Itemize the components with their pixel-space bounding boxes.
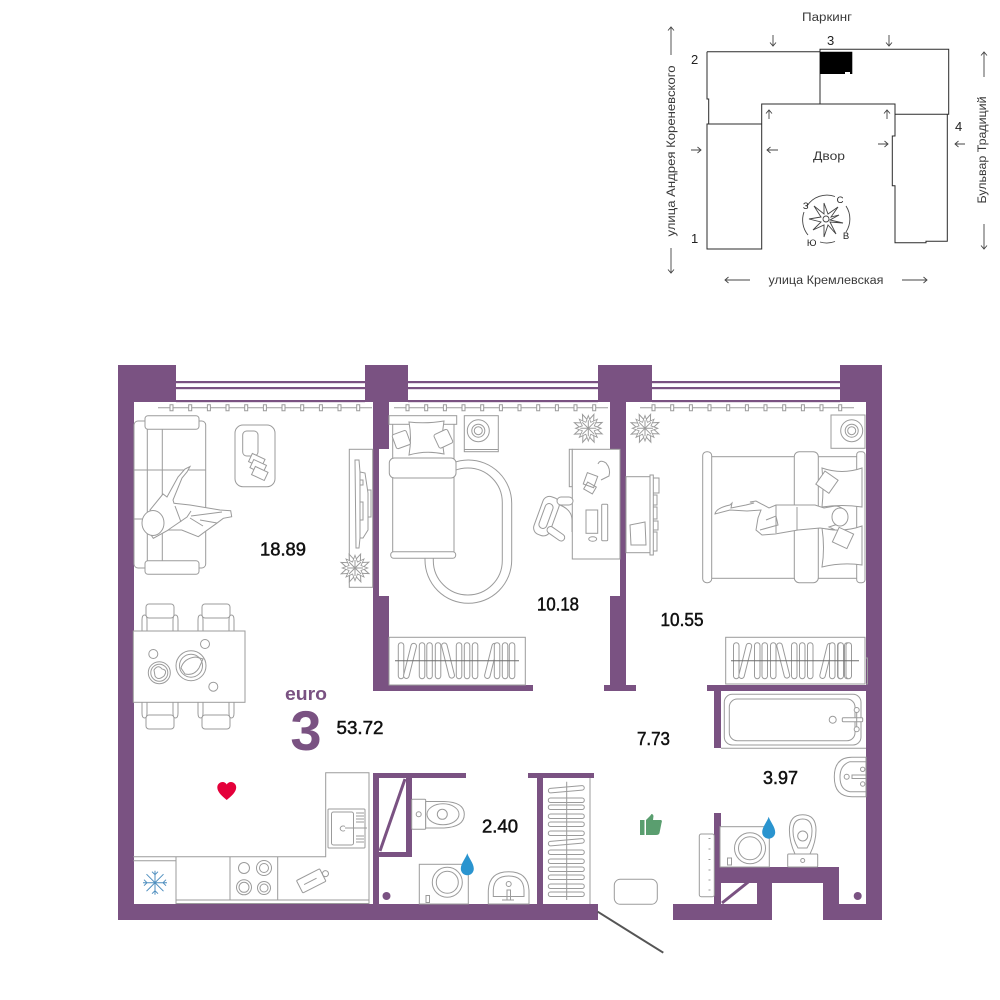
wardrobe room 3 bbox=[726, 637, 868, 684]
bathroom 2 fixtures bbox=[412, 778, 590, 904]
highlighted apartment section bbox=[820, 52, 852, 74]
bathroom 3 fixtures bbox=[699, 694, 866, 897]
icon: water drop bbox=[461, 853, 474, 875]
section numbers: 1 bbox=[691, 231, 698, 246]
coat rack bbox=[548, 778, 590, 904]
wash basin bbox=[488, 872, 529, 904]
desk with computer bbox=[569, 449, 620, 559]
doormat bbox=[614, 879, 657, 904]
person on bed bbox=[715, 501, 848, 535]
room count numeral: 3 bbox=[290, 699, 322, 762]
nightstand with lamp bbox=[464, 416, 498, 452]
living room furniture bbox=[133, 416, 375, 904]
building outline bbox=[707, 49, 949, 249]
compass: З bbox=[803, 201, 809, 212]
direction arrows bbox=[668, 27, 987, 283]
kitchen sink bbox=[328, 809, 367, 848]
label: Traditions boulevard: Бульвар Традиций bbox=[977, 96, 989, 204]
cutting board bbox=[296, 866, 331, 893]
compass bbox=[803, 195, 850, 249]
washing machine bbox=[419, 864, 468, 904]
area: corridor: 7.73 bbox=[637, 729, 670, 749]
wardrobe room 2 bbox=[389, 637, 525, 685]
entrance door bbox=[598, 912, 663, 953]
plant: living room bbox=[335, 548, 375, 588]
area: room 2: 10.18 bbox=[537, 594, 579, 614]
curtain rails bbox=[158, 405, 854, 411]
toilet bbox=[788, 815, 818, 867]
label: Koreneevskogo street: улица Андрея Кореневского bbox=[666, 66, 678, 236]
section numbers: 3 bbox=[827, 33, 834, 48]
nightstand with lamp bbox=[831, 415, 865, 448]
section numbers: 2 bbox=[691, 52, 698, 67]
area: room 3: 10.55 bbox=[660, 610, 704, 630]
area: bathroom 2: 2.40 bbox=[482, 817, 518, 837]
wash basin bbox=[834, 757, 866, 797]
label: Kremlevskaya street: улица Кремлевская bbox=[768, 275, 884, 287]
coffee table with tablet and papers bbox=[235, 425, 275, 487]
kitchen counter bbox=[133, 773, 369, 904]
room 2 furniture bbox=[389, 409, 620, 685]
icon: thumbs up bbox=[640, 814, 662, 835]
oval rug bbox=[425, 460, 512, 603]
site plan bbox=[666, 12, 989, 287]
icon: water drop bbox=[762, 817, 775, 839]
person on sofa bbox=[142, 466, 232, 538]
section numbers bbox=[691, 33, 962, 246]
brand label: euro: euro bbox=[285, 684, 327, 704]
plant: room 3 bbox=[625, 409, 665, 448]
area: total: 53.72 bbox=[336, 718, 384, 738]
tv console bbox=[349, 449, 373, 587]
double bed bbox=[703, 452, 865, 583]
dining table with chairs bbox=[133, 604, 245, 729]
single bed bbox=[389, 416, 457, 558]
console with items bbox=[626, 475, 659, 555]
compass: В bbox=[843, 231, 849, 242]
icon: heart bbox=[217, 782, 236, 800]
bathtub bbox=[721, 694, 866, 748]
floor plan walls bbox=[118, 365, 882, 920]
washing machine bbox=[720, 827, 769, 867]
area: living room: 18.89 bbox=[260, 540, 306, 560]
radiator bbox=[699, 834, 714, 897]
label: yard: Двор bbox=[813, 151, 845, 163]
label: parking: Паркинг bbox=[802, 12, 852, 24]
compass: Ю bbox=[807, 238, 817, 249]
area: bathroom 3: 3.97 bbox=[763, 768, 798, 788]
office chair bbox=[532, 494, 573, 542]
compass: С bbox=[837, 195, 844, 206]
room 3 furniture bbox=[625, 409, 868, 684]
toilet bbox=[412, 799, 464, 829]
hob bbox=[236, 860, 272, 895]
icon: snowflake bbox=[143, 871, 167, 895]
section numbers: 4 bbox=[955, 119, 962, 134]
sofa bbox=[134, 416, 206, 574]
plant: room 2 bbox=[569, 409, 608, 448]
